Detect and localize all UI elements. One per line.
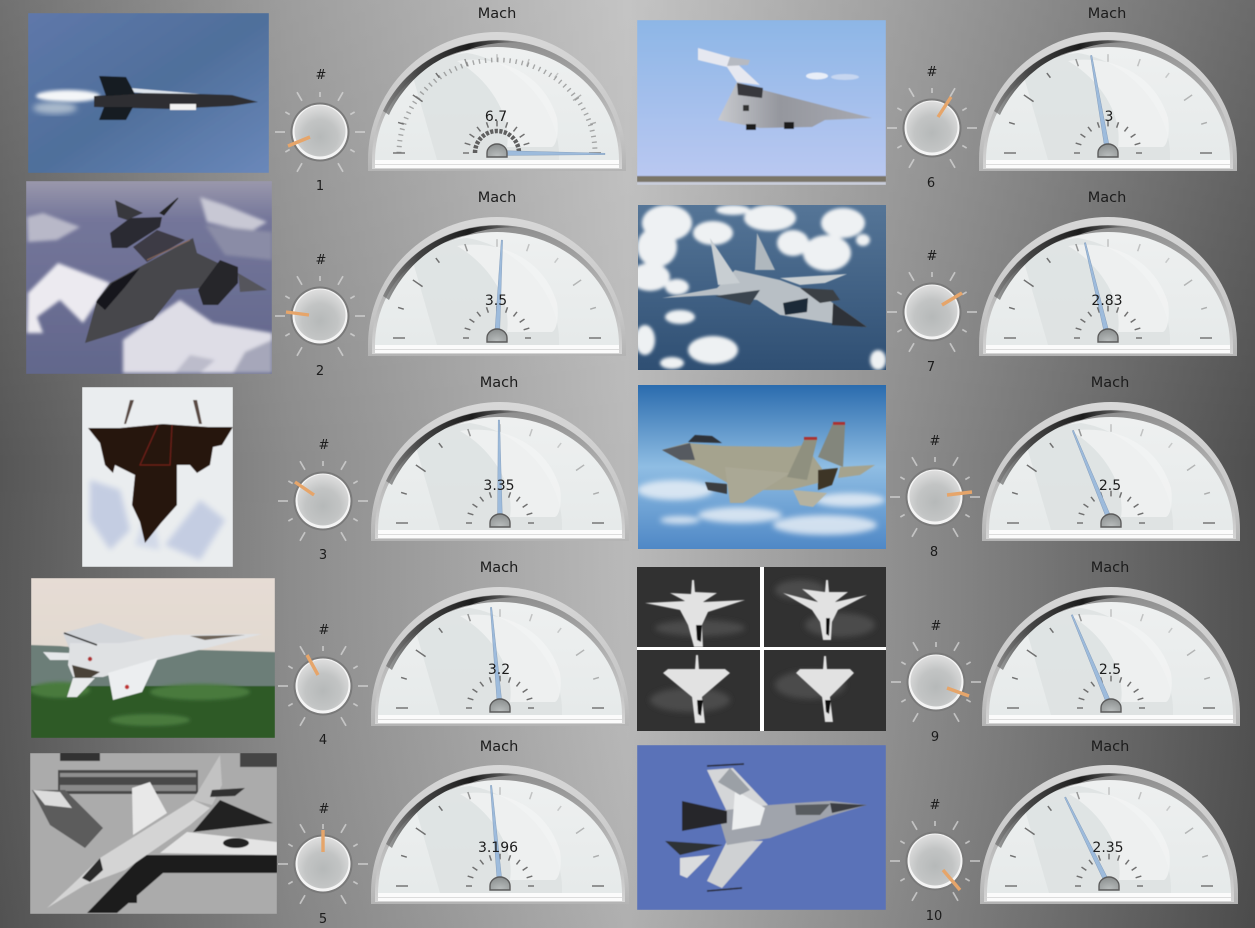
knob 1	[275, 68, 365, 194]
gauge 2: Mach 3.5	[368, 217, 626, 356]
Mach headings	[478, 6, 1129, 755]
Mach headings: Mach	[480, 560, 518, 576]
rank number: 1	[316, 179, 324, 194]
rank number: 3	[319, 548, 327, 563]
knob 4	[278, 623, 368, 748]
rank number: 2	[316, 364, 324, 379]
value: 3.5	[485, 293, 507, 309]
photo 10: Su-27 camouflage jet on blue sky	[637, 745, 886, 910]
needle	[1083, 242, 1110, 339]
pointer	[321, 830, 325, 852]
hash label: #	[319, 438, 329, 453]
Mach headings: Mach	[478, 190, 516, 206]
knob 5	[278, 802, 368, 927]
gauge 9: Mach 2.5	[982, 587, 1240, 726]
photo 4: MiG-25 over forest	[30, 578, 275, 738]
needle	[489, 785, 502, 886]
rank number: 9	[931, 730, 939, 745]
gauge 10: Mach 2.35	[980, 765, 1238, 904]
value: 3.196	[478, 840, 518, 856]
rank number: 8	[930, 545, 938, 560]
photo 7: MiG-31 among clouds	[630, 205, 886, 370]
photo 1: rocket plane with exhaust trail	[28, 13, 269, 173]
Mach headings: Mach	[1091, 375, 1129, 391]
Mach headings: Mach	[1088, 190, 1126, 206]
value: 3	[1105, 109, 1113, 125]
knob 6	[887, 65, 977, 191]
pointer	[938, 97, 951, 117]
rank number: 10	[926, 909, 942, 924]
Mach headings: Mach	[480, 739, 518, 755]
hash label: #	[316, 253, 326, 268]
value: 3.2	[488, 662, 510, 678]
needle	[489, 607, 502, 708]
gauge 5: Mach 3.196	[371, 765, 629, 904]
hash label: #	[319, 802, 329, 817]
gauge 4: Mach 3.2	[371, 587, 629, 726]
needle	[495, 240, 504, 338]
knob 7	[887, 249, 977, 375]
rank number: 4	[319, 733, 327, 748]
rank number: 7	[927, 360, 935, 375]
photo 8: F-15 Eagle over clouds	[637, 385, 886, 549]
value: 2.5	[1099, 478, 1121, 494]
photo 3: SR-71 from below	[82, 387, 233, 567]
knob 9	[891, 619, 981, 745]
gauge 1: Mach 6.7	[368, 32, 626, 171]
photo 9: four views of a swing-wing jet	[637, 567, 886, 731]
hash label: #	[931, 619, 941, 634]
knob 10	[890, 798, 980, 924]
rank number: 6	[927, 176, 935, 191]
pointer	[307, 655, 318, 675]
knob 8	[890, 434, 980, 560]
gauge 7: Mach 2.83	[979, 217, 1237, 356]
hash label: #	[316, 68, 326, 83]
needle	[496, 420, 502, 523]
hash label: #	[927, 249, 937, 264]
needle	[1071, 430, 1113, 524]
Mach headings: Mach	[1088, 6, 1126, 22]
needle	[497, 151, 605, 156]
inner tick ring	[475, 131, 519, 153]
value: 6.7	[485, 109, 507, 125]
hash label: #	[930, 434, 940, 449]
value: 2.83	[1091, 293, 1123, 309]
value: 2.35	[1092, 840, 1124, 856]
gauge 8: Mach 2.5	[982, 402, 1240, 541]
gauge 3: Mach 3.35	[371, 402, 629, 541]
hash label: #	[930, 798, 940, 813]
value: 3.35	[483, 478, 515, 494]
pointer	[286, 312, 309, 315]
pointer	[295, 482, 314, 495]
rank number: 5	[319, 912, 327, 927]
photo 5: black and white experimental jet with crew	[30, 753, 277, 914]
pointer	[288, 137, 310, 146]
Mach headings: Mach	[1091, 560, 1129, 576]
pointer	[947, 688, 969, 696]
value: 2.5	[1099, 662, 1121, 678]
photo 2: SR-71 over snowy mountains	[26, 181, 272, 374]
needle	[1089, 55, 1110, 153]
fine scale ticks	[399, 60, 595, 153]
Mach headings: Mach	[478, 6, 516, 22]
hash label: #	[927, 65, 937, 80]
needle	[1070, 614, 1113, 709]
pointer	[942, 293, 962, 305]
knob 3	[278, 438, 368, 563]
pointer	[943, 870, 960, 890]
gauge 6: Mach 3	[979, 32, 1237, 171]
Mach headings: Mach	[1091, 739, 1129, 755]
needle	[1063, 796, 1111, 887]
photo 6: XB-70 Valkyrie landing	[637, 20, 886, 185]
Mach headings: Mach	[480, 375, 518, 391]
hash label: #	[319, 623, 329, 638]
pointer	[947, 492, 972, 495]
knob 2	[275, 253, 365, 379]
